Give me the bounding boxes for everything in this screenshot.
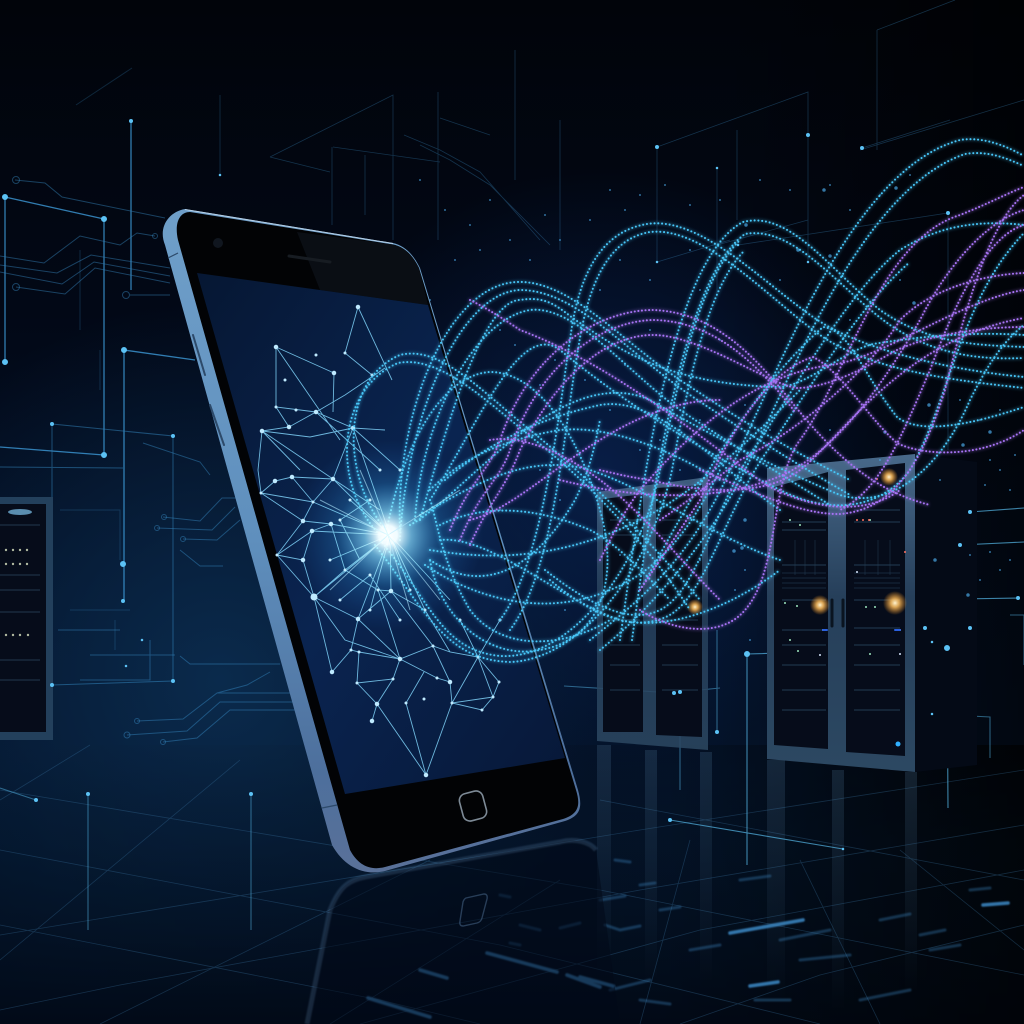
home button bbox=[458, 789, 488, 823]
network nodes bbox=[261, 307, 500, 775]
floor grid lines bbox=[0, 745, 1024, 1024]
left server rack bbox=[0, 497, 53, 740]
rack rows bbox=[0, 525, 40, 680]
bezel reflection bbox=[297, 232, 428, 305]
network lines bbox=[258, 307, 500, 775]
rack panel bbox=[0, 504, 46, 732]
middle server rack bbox=[597, 477, 708, 750]
camera bbox=[213, 238, 223, 248]
right server rack bbox=[767, 454, 977, 772]
reflected body bbox=[307, 840, 620, 1024]
amber lights bbox=[810, 468, 907, 615]
rack side bbox=[915, 454, 977, 772]
screen bbox=[197, 273, 565, 794]
smartphone bbox=[163, 209, 580, 872]
network constellation on screen bbox=[258, 307, 500, 775]
amber light bbox=[687, 599, 703, 615]
rack door handles bbox=[832, 600, 843, 626]
rack status lights bbox=[785, 479, 905, 744]
rack frame bbox=[767, 454, 915, 772]
rack door panels bbox=[774, 463, 905, 756]
floor bbox=[0, 745, 1024, 1024]
floating particles bbox=[290, 175, 1015, 735]
background circuit lines right and floor bbox=[0, 508, 1024, 930]
phone face bbox=[177, 212, 578, 868]
purple strands bbox=[450, 187, 1024, 629]
phone frame bbox=[163, 209, 580, 872]
background circuit lines left bbox=[0, 68, 300, 744]
rack equipment bbox=[610, 520, 698, 690]
reflected edge bbox=[307, 840, 596, 1024]
rack frame bbox=[597, 477, 708, 750]
reflected home button bbox=[460, 894, 487, 926]
data stream waves bbox=[347, 139, 1024, 662]
side buttons bbox=[193, 335, 224, 445]
rack reflections bbox=[597, 745, 917, 1010]
rack top light bbox=[8, 509, 32, 515]
circuit node dots bbox=[5, 121, 1018, 849]
rack lights bbox=[6, 550, 28, 635]
frame seams bbox=[168, 253, 337, 808]
rack frame bbox=[0, 497, 53, 740]
background circuit lines top bbox=[270, 0, 1024, 450]
central light burst bbox=[293, 440, 483, 630]
floor light dashes bbox=[368, 860, 1008, 1017]
burst rays bbox=[320, 470, 460, 610]
phone reflection bbox=[307, 840, 620, 1024]
frame highlight bbox=[185, 210, 393, 244]
blue strands bbox=[347, 139, 1024, 662]
rack door panels bbox=[603, 485, 702, 737]
rack equipment bbox=[782, 510, 900, 710]
speaker bbox=[289, 256, 330, 262]
